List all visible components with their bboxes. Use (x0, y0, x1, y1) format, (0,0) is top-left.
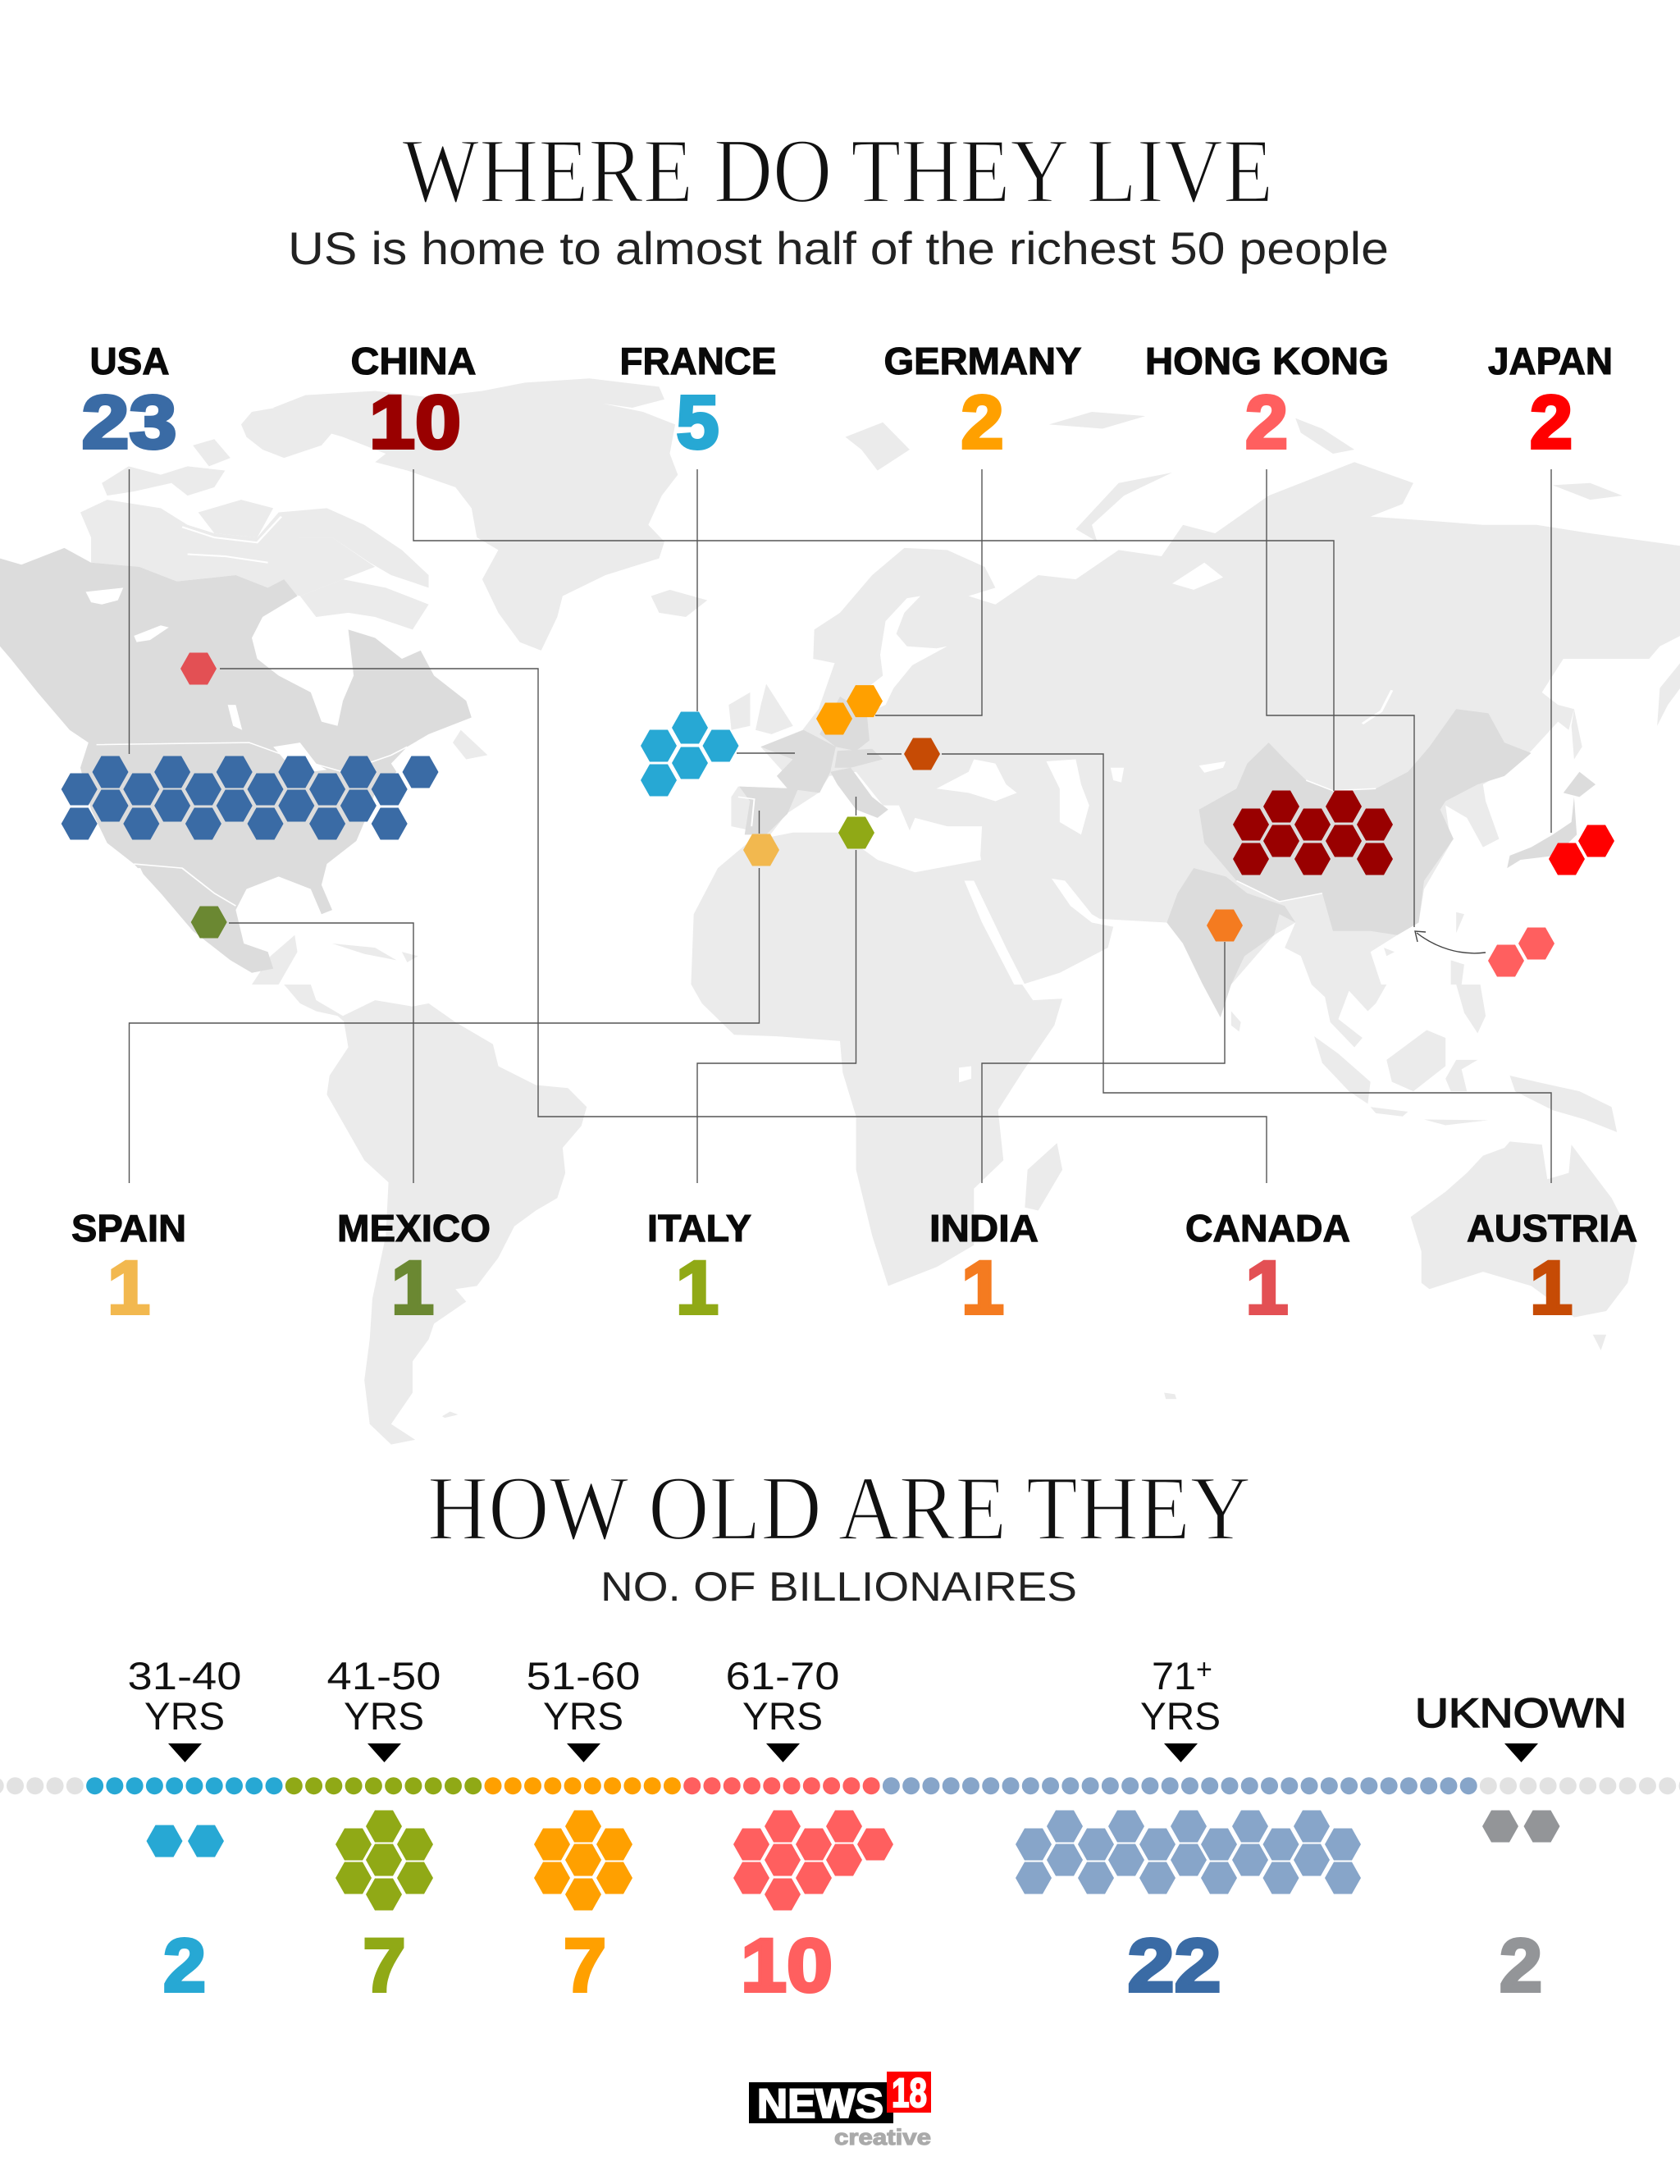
count: 31-40: 2 (163, 1924, 206, 2008)
stat: Germany: 2 (961, 381, 1004, 464)
stat: Mexico: MEXICO (337, 1207, 491, 1250)
age label: 71+: YRS (1140, 1694, 1221, 1738)
stat: Hong Kong: HONG KONG (1145, 340, 1389, 382)
hexagons: 31-40 (146, 1825, 224, 1857)
stat: USA (82, 340, 177, 464)
count: 71+: 22 (1127, 1924, 1221, 2008)
hexagon: Mexico (191, 906, 227, 939)
stat: Austria: 1 (1530, 1246, 1573, 1330)
age label: 31-40: 31-40 (128, 1654, 241, 1697)
stat: France: 5 (676, 381, 719, 464)
hexagons: Hong Kong (1488, 927, 1554, 976)
age label: unknown: UKNOWN (1415, 1690, 1627, 1736)
hexagon: Italy (838, 817, 874, 848)
stat: India (929, 1207, 1039, 1330)
stat: Hong Kong (1145, 340, 1389, 464)
world map (0, 378, 1680, 1445)
connector lines (130, 469, 1551, 1183)
pointer triangles (168, 1743, 1538, 1762)
subtitle: no. of billionaires: NO. OF BILLIONAIRES (600, 1564, 1077, 1610)
stat: India: 1 (961, 1246, 1004, 1330)
stat: China (351, 340, 476, 464)
stat: Italy: ITALY (647, 1207, 751, 1250)
stat: France: FRANCE (620, 340, 776, 382)
hexagons: 71+ (1016, 1810, 1361, 1894)
count: 61-70: 10 (741, 1924, 833, 2008)
hexagons: Japan (1549, 825, 1614, 875)
age label: 31-40: YRS (144, 1694, 225, 1738)
age label: 41-50 (326, 1654, 441, 1738)
age label: 51-60: 51-60 (527, 1654, 640, 1697)
title: where do they live: WHERE DO THEY LIVE (402, 121, 1273, 222)
map: south america (284, 985, 840, 1445)
stat: Germany (884, 340, 1081, 464)
stat: India: INDIA (929, 1207, 1039, 1250)
logo: News18 creative (749, 2070, 931, 2150)
arrow: hong kong pointer (1415, 931, 1486, 953)
stat: Spain: SPAIN (71, 1207, 186, 1250)
stat: Japan (1488, 340, 1613, 464)
age label: 71+: 71 (1152, 1654, 1196, 1697)
logo: News18 creative: NEWS (757, 2081, 883, 2127)
age label: 61-70: YRS (742, 1694, 823, 1738)
stat: Canada (1185, 1207, 1350, 1330)
hexagons: unknown (1482, 1810, 1560, 1843)
stat: Japan: JAPAN (1488, 340, 1613, 382)
hexagons: 41-50 (336, 1810, 433, 1910)
stat: Italy: 1 (676, 1246, 719, 1330)
stat: Austria: AUSTRIA (1467, 1207, 1637, 1250)
stat: USA: USA (90, 340, 169, 382)
stat: Mexico (337, 1207, 491, 1330)
count: 41-50: 7 (363, 1924, 405, 2008)
dotted timeline (0, 1777, 1680, 1794)
stat: Austria (1467, 1207, 1637, 1330)
hexagon: Spain (743, 834, 779, 866)
stat: China: CHINA (351, 340, 476, 382)
age label: 71+ (1140, 1654, 1221, 1738)
hexagons: USA (62, 756, 438, 840)
age label: 51-60 (527, 1654, 640, 1738)
count: unknown: 2 (1500, 1924, 1542, 2008)
stat: Canada: CANADA (1185, 1207, 1350, 1250)
map: eurasia and north africa (691, 412, 1680, 985)
stat: Hong Kong: 2 (1245, 381, 1288, 464)
age label: 41-50: 41-50 (326, 1654, 441, 1697)
age label: 61-70 (725, 1654, 840, 1738)
subtitle: US is home to almost half of the richest 50 people (288, 222, 1389, 274)
stat: Mexico: 1 (391, 1246, 434, 1330)
age label: 71+: + (1196, 1654, 1212, 1685)
stat: France (620, 340, 776, 464)
hexagons: China (1233, 791, 1393, 875)
hexagons: 61-70 (733, 1810, 893, 1910)
title: how old are they: HOW OLD ARE THEY (427, 1458, 1251, 1560)
count: 51-60: 7 (564, 1924, 606, 2008)
stat: China: 10 (369, 381, 461, 464)
age label: 51-60: YRS (543, 1694, 623, 1738)
stat: USA: 23 (82, 381, 177, 464)
stat: Spain: 1 (107, 1246, 150, 1330)
map: africa, oceania (840, 985, 1636, 1399)
stat: Italy (647, 1207, 751, 1330)
stat: Japan: 2 (1530, 381, 1573, 464)
stat: Canada: 1 (1245, 1246, 1288, 1330)
stat: Germany: GERMANY (884, 340, 1081, 382)
map: north america (0, 378, 793, 985)
hexagon: Canada (180, 653, 217, 684)
age label: 31-40 (128, 1654, 241, 1738)
hexagons: France (641, 712, 738, 796)
age label: 41-50: YRS (344, 1694, 424, 1738)
hexagon: India (1207, 909, 1243, 942)
age label: 61-70: 61-70 (725, 1654, 840, 1697)
hexagons: Germany (816, 685, 883, 735)
logo: News18 creative: creative (834, 2125, 931, 2150)
logo: News18 creative: 18 (892, 2070, 927, 2116)
hexagons: 51-60 (534, 1810, 632, 1910)
hexagon: Austria (904, 738, 940, 770)
stat: Spain (71, 1207, 186, 1330)
